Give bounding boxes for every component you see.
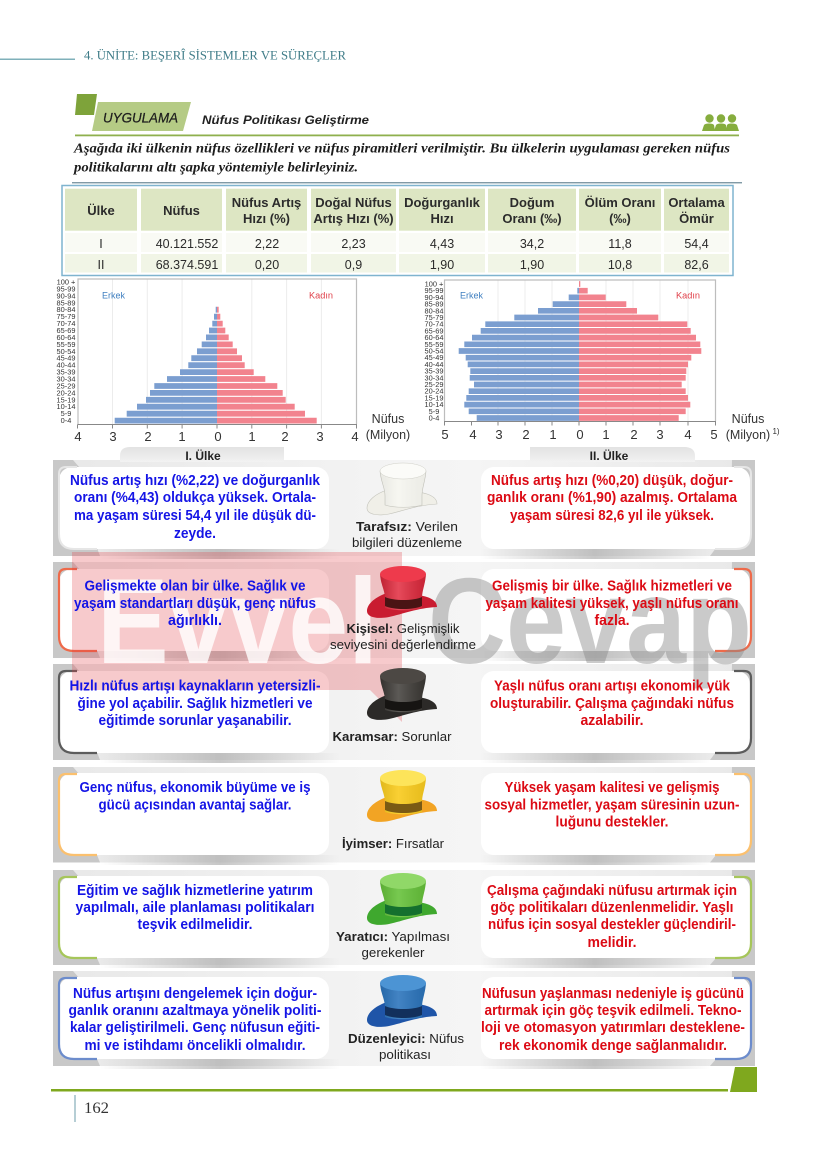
age labels: 45-49: [57, 354, 75, 363]
population pyramid: country II: Kadın: [676, 290, 700, 300]
data table: Doğurganlık: [404, 195, 481, 210]
data table: 82,6: [684, 258, 709, 272]
data table: Nüfus Artış: [232, 195, 301, 210]
text: country II: Gelişmiş bir ülke. Sağlık hizmetleri ve: [492, 578, 732, 594]
watermark red flag: [72, 552, 402, 722]
axis numbers: 1: [248, 429, 256, 444]
hat label: gerekenler: [362, 946, 424, 960]
data table: 1,90: [430, 258, 454, 272]
hat label: [352, 520, 462, 550]
age labels: 25-29: [425, 380, 443, 389]
text: country I: gücü açısından avantaj sağlar.: [98, 798, 292, 814]
data table: II: [98, 258, 104, 272]
page number: 162: [84, 1100, 109, 1117]
axis numbers: 5: [441, 427, 449, 442]
watermark word: Evvel: Evvel: [97, 553, 378, 689]
data table: 40.121.552: [156, 237, 218, 251]
age labels: 5-9: [429, 407, 439, 416]
text: country I: ağırlıklı.: [168, 613, 222, 629]
axis numbers: [74, 429, 359, 444]
data table: Ölüm Oranı: [585, 195, 655, 210]
age labels: 0-4: [429, 414, 439, 422]
age labels: 20-24: [57, 388, 75, 397]
data table: Hızı: [430, 211, 454, 226]
axis numbers: 3: [495, 427, 503, 442]
age labels: 70-74: [57, 319, 75, 328]
text: country II: Çalışma çağındaki nüfusu artırmak için: [487, 883, 737, 899]
text: country I: [80, 780, 310, 814]
row panel: yellow hat: [53, 767, 755, 865]
data table: Ülke: [87, 203, 115, 218]
bars: female: [579, 284, 701, 418]
hat label: İyimser: Fırsatlar: [342, 836, 444, 851]
data table: 11,8: [608, 237, 632, 251]
axis numbers: 1: [178, 429, 186, 444]
banner label: UYGULAMA: UYGULAMA: [103, 110, 178, 126]
row panel: green hat: [53, 870, 755, 968]
axis title: [726, 412, 780, 442]
data table: I: [99, 237, 103, 251]
data table: 34,2: [520, 237, 544, 251]
age labels: 10-14: [425, 400, 443, 409]
text: country II: [484, 780, 740, 830]
text: country II: sosyal hizmetler, yaşam süresinin uzun-: [484, 798, 740, 814]
text: country II: Nüfus artış hızı (%0,20) düşük, doğur-: [491, 473, 733, 489]
text: country II: loji ve otomasyon yatırımları desteklene-: [481, 1020, 745, 1036]
age labels: 45-49: [425, 353, 443, 362]
text: country I: Nüfus artış hızı (%2,22) ve doğurganlık: [70, 473, 321, 489]
age labels: 95-99: [57, 284, 75, 293]
data table: 2,22: [255, 237, 279, 251]
hat label: [330, 622, 476, 652]
axis numbers: 3: [656, 427, 664, 442]
icon: green hat: [367, 873, 437, 925]
axis numbers: 4: [684, 427, 692, 442]
hat label: Yaratıcı: Yapılması: [336, 930, 450, 944]
age labels: 15-19: [425, 393, 443, 402]
icon: black hat: [367, 668, 437, 720]
axis numbers: 3: [109, 429, 117, 444]
data table: 2,23: [341, 237, 366, 251]
age labels: [57, 278, 75, 425]
hat label: Karamsar: Sorunlar: [332, 730, 452, 744]
age labels: 40-44: [57, 361, 75, 370]
data table: 0,9: [345, 258, 362, 272]
header: unit title: 4. ÜNİTE: BEŞERÎ SİSTEMLER VE SÜREÇLER: [84, 48, 346, 62]
text: country II: artırmak için göç teşvik edilmeli. Tekno-: [484, 1003, 742, 1019]
icon: red hat: [367, 566, 437, 618]
text: country II: rek ekonomik denge sağlanmalıdır.: [499, 1038, 727, 1054]
axis numbers: 2: [630, 427, 638, 442]
text: country II: Yüksek yaşam kalitesi ve gelişmiş: [504, 780, 720, 796]
watermark word: Cevap: Cevap: [428, 553, 752, 689]
data table: [62, 186, 733, 276]
text: country I: mi ve istihdamı öncelikli olmalıdır.: [84, 1038, 306, 1054]
axis numbers: 1: [549, 427, 557, 442]
text: country I: Hızlı nüfus artışı kaynakların yetersizli-: [70, 678, 321, 694]
hat label: Tarafsız: Verilen: [356, 520, 458, 534]
age labels: 65-69: [57, 326, 75, 335]
text: country I: yapılmalı, aile planlaması politikaları: [76, 900, 314, 916]
column tab: II. Ülke: [530, 447, 695, 463]
population pyramid: country II: Erkek: [460, 290, 483, 300]
text: country II: Nüfusun yaşlanması nedeniyle iş gücünü: [482, 986, 744, 1002]
column tab: I. Ülke: [120, 447, 284, 463]
text: country II: [490, 678, 734, 729]
age labels: 5-9: [61, 409, 71, 418]
text: country II: azalabilir.: [580, 713, 644, 729]
data table: Nüfus: [163, 203, 200, 218]
text: country I: oranı (%4,43) oldukça yüksek. Ortala-: [74, 490, 316, 506]
age labels: 60-64: [425, 333, 443, 342]
age labels: [425, 280, 443, 422]
icon: blue hat: [367, 975, 437, 1027]
footer corner tab: [730, 1067, 757, 1092]
population pyramid: country I: [57, 278, 410, 444]
text: country I: [70, 678, 321, 729]
age labels: 30-34: [425, 373, 443, 382]
text: country I: [74, 578, 316, 629]
axis numbers: 4: [351, 429, 359, 444]
hat label: Kişisel: Gelişmişlik: [346, 622, 460, 636]
icon: white hat: [367, 463, 437, 515]
data table: 68.374.591: [156, 258, 218, 272]
row content: blue hat, regulator: [68, 975, 745, 1062]
text: country I: eğitimde sorunlar yaşanabilir.: [98, 713, 292, 729]
hat label: [348, 1032, 464, 1062]
banner label: UYGULAMA: [92, 102, 191, 131]
text: country I: Eğitim ve sağlık hizmetlerine yatırım: [77, 883, 313, 899]
axis title: Nüfus: [732, 412, 764, 426]
age labels: 65-69: [425, 326, 443, 335]
age labels: 20-24: [425, 387, 443, 396]
text: country I: Gelişmekte olan bir ülke. Sağlık ve: [84, 578, 306, 594]
data table: Doğal Nüfus: [315, 195, 392, 210]
instruction text: politikalarını altı şapka yöntemiyle belirleyiniz.: [73, 160, 358, 176]
age labels: 100 +: [57, 278, 75, 286]
text: country I: yaşam standartları düşük, genç nüfus: [74, 596, 316, 612]
axis numbers: 1: [602, 427, 610, 442]
text: country I: Genç nüfus, ekonomik büyüme ve iş: [80, 780, 310, 796]
icon: yellow hat: [367, 770, 437, 822]
age labels: 70-74: [425, 320, 443, 329]
row content: yellow hat, optimist: [80, 770, 740, 851]
activity title: Nüfus Politikası Geliştirme: [202, 115, 370, 127]
hat label: Düzenleyici: Nüfus: [348, 1032, 464, 1046]
text: country I: kalar geliştirilmeli. Genç nüfusun eğiti-: [70, 1020, 320, 1036]
icon: group of people: [702, 114, 739, 131]
column tab: I. Ülke: I. Ülke: [185, 448, 221, 463]
text: country II: [487, 473, 738, 524]
age labels: 50-54: [57, 347, 75, 356]
axis title: Nüfus: [372, 412, 404, 426]
text: country I: [76, 883, 314, 933]
age labels: 55-59: [57, 340, 75, 349]
age labels: 35-39: [57, 368, 75, 377]
data table: Ortalama: [668, 195, 725, 210]
data table: Ömür: [679, 211, 714, 226]
axis numbers: 4: [469, 427, 477, 442]
age labels: 40-44: [425, 360, 443, 369]
axis numbers: 0: [214, 429, 222, 444]
column tab: II. Ülke: II. Ülke: [590, 448, 629, 463]
population pyramid: country I: Kadın: [309, 290, 333, 300]
text: country II: ganlık oranı (%1,90) azalmış. Ortalama: [487, 490, 738, 506]
data table: 0,20: [255, 258, 279, 272]
text: country II: [487, 883, 737, 951]
icon: green square: [75, 94, 97, 115]
row content: red hat, personal: [74, 566, 738, 652]
data table: 1,90: [520, 258, 544, 272]
data table: 4,43: [430, 237, 454, 251]
hat label: [336, 930, 450, 960]
data table: Doğum: [510, 195, 554, 210]
text: country II: göç politikaları düzenlenmelidir. Yaşlı: [490, 900, 734, 916]
age labels: 90-94: [425, 293, 443, 302]
instruction text: Aşağıda iki ülkenin nüfus özellikleri ve nüfus piramitleri verilmiştir. Bu ülkelerin uygulaması gereken nüfus: [73, 142, 731, 156]
population pyramid: country I: Erkek: [102, 290, 125, 300]
bars: male: [459, 291, 579, 418]
axis numbers: 3: [316, 429, 324, 444]
axis numbers: 2: [522, 427, 530, 442]
age labels: 50-54: [425, 346, 443, 356]
axis numbers: [441, 427, 718, 442]
bars: male: [115, 310, 217, 421]
data table: Hızı (%): [243, 211, 290, 226]
text: country II: fazla.: [594, 613, 630, 629]
age labels: 60-64: [57, 333, 75, 342]
hat label: bilgileri düzenleme: [352, 536, 462, 550]
row panel: black hat: [53, 664, 755, 763]
axis numbers: 5: [710, 427, 718, 442]
row panel: red hat: [53, 562, 755, 661]
data table: 54,4: [684, 237, 709, 251]
text: country II: luğunu destekler.: [556, 814, 668, 830]
text: country II: yaşam süresi 82,6 yıl ile yüksek.: [510, 508, 714, 524]
row content: white hat, neutral: [70, 463, 738, 550]
text: country I: ganlık oranını azaltmaya yönelik politi-: [68, 1003, 322, 1019]
age labels: 85-89: [425, 300, 443, 309]
text: country II: melidir.: [588, 935, 636, 951]
axis numbers: 4: [74, 429, 82, 444]
axis title: (Milyon): [726, 428, 770, 442]
age labels: 35-39: [425, 367, 443, 376]
age labels: 10-14: [57, 402, 75, 411]
text: country I: zeyde.: [174, 526, 216, 542]
row content: black hat, pessimist: [70, 668, 734, 744]
text: country II: Yaşlı nüfus oranı artışı ekonomik yük: [494, 678, 731, 694]
text: country II: nüfus için sosyal destekler güçlendiril-: [488, 917, 736, 933]
data table: 10,8: [608, 258, 632, 272]
axis title: [366, 412, 410, 442]
age labels: 15-19: [57, 395, 75, 404]
age labels: 85-89: [57, 298, 75, 307]
text: country I: Nüfus artışını dengelemek için doğur-: [73, 986, 317, 1002]
data table: Artış Hızı (%): [313, 211, 394, 226]
row content: green hat, creative: [76, 873, 737, 960]
instruction text: [72, 142, 742, 183]
axis numbers: 0: [576, 427, 584, 442]
text: country I: teşvik edilmelidir.: [138, 917, 252, 933]
axis numbers: 2: [281, 429, 289, 444]
hat label: seviyesini değerlendirme: [330, 638, 476, 652]
age labels: 80-84: [425, 306, 443, 315]
axis title: 1): [772, 427, 780, 436]
age labels: 55-59: [425, 340, 443, 349]
age labels: 90-94: [57, 291, 75, 300]
text: country I: ma yaşam süresi 54,4 yıl ile düşük dü-: [74, 508, 316, 524]
text: country II: yaşam kalitesi yüksek, yaşlı nüfus oranı: [486, 596, 738, 612]
text: country II: oluşturabilir. Çalışma çağındaki nüfus: [490, 696, 734, 712]
axis numbers: 2: [144, 429, 152, 444]
data table: (‰): [609, 211, 631, 226]
footer: [51, 1067, 757, 1122]
age labels: 30-34: [57, 374, 75, 384]
age labels: 75-79: [57, 312, 75, 321]
text: country I: ğine yol açabilir. Sağlık hizmetleri ve: [78, 696, 312, 712]
hat label: politikası: [379, 1048, 431, 1062]
axis title: (Milyon): [366, 428, 410, 442]
text: country II: [486, 578, 738, 629]
activity banner: [75, 94, 739, 136]
text: country I: [70, 473, 321, 542]
age labels: 80-84: [57, 305, 75, 314]
age labels: 0-4: [61, 416, 71, 425]
watermark: Evvel Cevap: [72, 552, 752, 722]
age labels: 95-99: [425, 286, 443, 295]
age labels: 25-29: [57, 382, 75, 390]
population pyramid: country II: [425, 280, 780, 442]
text: country II: [481, 986, 745, 1054]
row panel: blue hat: [53, 971, 755, 1069]
row panel: white hat: [53, 460, 755, 559]
text: country I: [68, 986, 322, 1054]
age labels: 75-79: [425, 313, 443, 322]
bars: female: [217, 310, 317, 421]
data table: Oranı (‰): [502, 211, 562, 226]
age labels: 100 +: [425, 280, 443, 288]
